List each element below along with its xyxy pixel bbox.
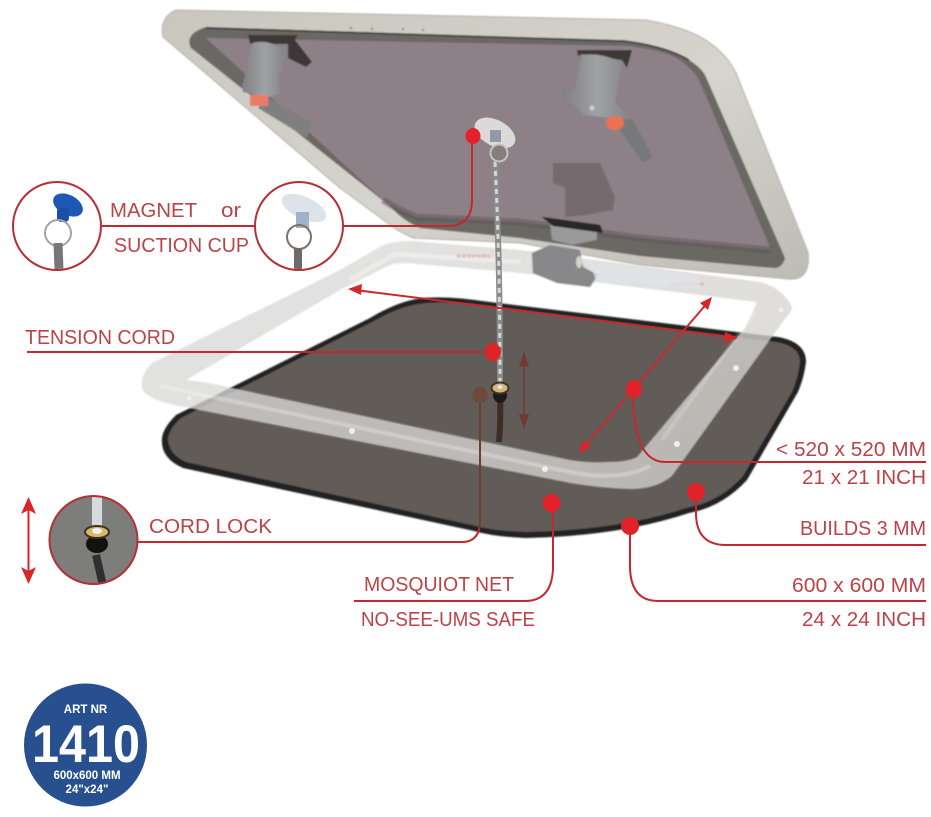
leader: outer size	[621, 517, 926, 601]
frame screw holes	[186, 308, 784, 472]
width arrow	[348, 284, 738, 343]
cord lock circle	[50, 495, 138, 590]
suction cup circle	[255, 182, 343, 270]
article badge: 1410	[32, 715, 140, 774]
label: inner size mm: < 520 x 520 MM	[776, 439, 926, 461]
label: outer size mm: 600 x 600 MM	[792, 575, 926, 597]
leader: tension cord	[27, 343, 501, 361]
article badge: ART NR	[64, 704, 108, 716]
magnet circle	[13, 182, 101, 270]
left latch	[242, 35, 312, 138]
magnet to suction line	[102, 225, 255, 227]
lower frame	[142, 241, 792, 489]
label: tension cord: TENSION CORD	[25, 327, 175, 349]
suction cup	[469, 111, 521, 162]
leader: cord lock	[138, 387, 488, 542]
label: builds: BUILDS 3 MM	[800, 518, 926, 540]
label: mosquito net: MOSQUIOT NET	[364, 574, 514, 596]
label: outer size inch: 24 x 24 INCH	[802, 609, 926, 631]
hinge	[532, 217, 700, 288]
raised lid	[162, 10, 808, 279]
label: or: or	[221, 200, 241, 222]
depth arrow	[579, 297, 712, 453]
leader: inner opening	[626, 380, 926, 462]
mosquito net	[162, 297, 806, 538]
label: cord lock: CORD LOCK	[149, 516, 273, 538]
cord travel arrow	[520, 354, 528, 427]
hinge shadow through glass	[553, 163, 615, 217]
leader: suction cup	[343, 128, 480, 226]
label: suction cup: SUCTION CUP	[114, 235, 249, 257]
leader: mosquito net	[354, 494, 560, 601]
leader: thickness	[687, 483, 926, 545]
right latch	[562, 50, 653, 163]
hatch illustration	[142, 10, 808, 538]
tension cord	[495, 162, 500, 382]
vertical arrow	[21, 497, 36, 584]
cord lock	[492, 382, 508, 442]
label: magnet: MAGNET	[110, 200, 197, 222]
article badge	[24, 684, 147, 806]
label: no-see-ums safe: NO-SEE-UMS SAFE	[361, 609, 535, 631]
article badge: 600x600 MM	[53, 770, 121, 782]
label: inner size inch: 21 x 21 INCH	[802, 467, 926, 489]
article badge: 24"x24"	[66, 784, 108, 796]
